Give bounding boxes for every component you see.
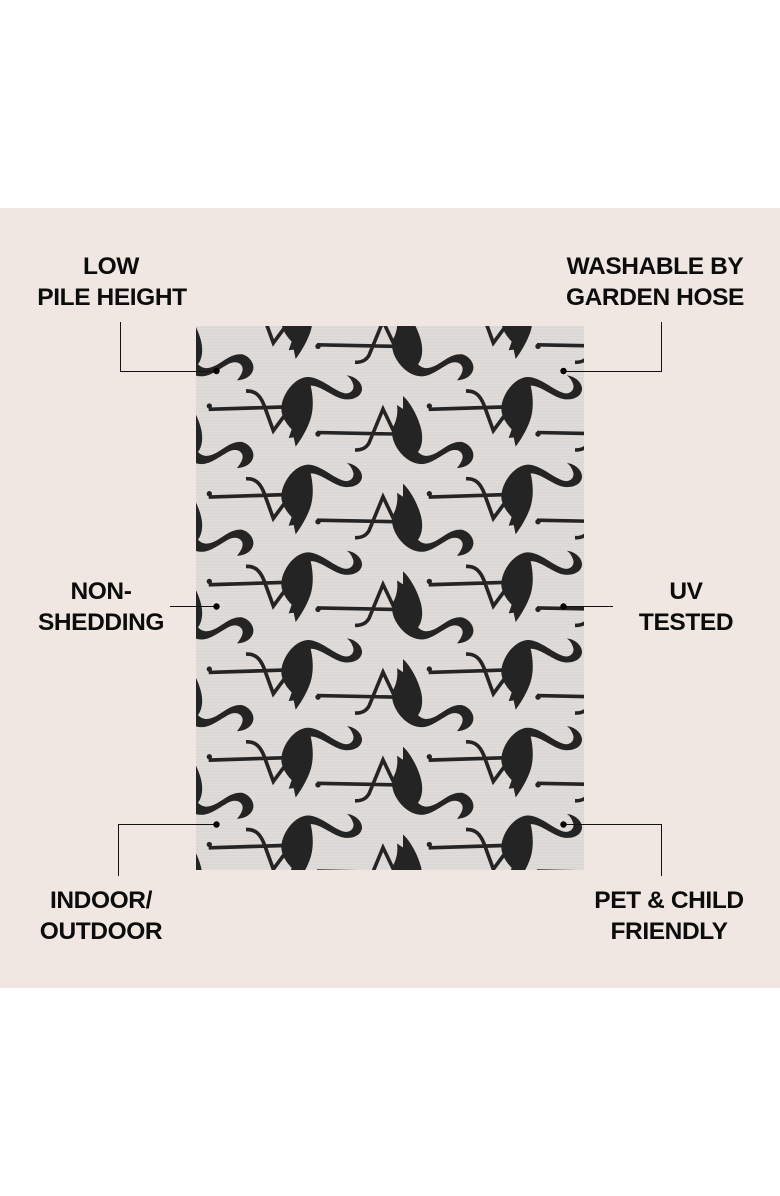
callout: non-shedding	[38, 578, 220, 636]
callout: low pile height: PILE HEIGHT	[37, 284, 187, 311]
callout: washable by garden hose: WASHABLE BY	[567, 253, 743, 280]
callout: non-shedding: NON-	[70, 578, 132, 605]
callout: low pile height: LOW	[83, 253, 140, 280]
flamingo row 4	[196, 638, 584, 732]
rug with flamingo pattern	[196, 326, 584, 870]
callout: pet and child friendly: PET & CHILD	[594, 887, 744, 914]
callout: washable by garden hose: GARDEN HOSE	[566, 284, 744, 311]
callout: pet and child friendly	[560, 821, 744, 945]
callout: pet and child friendly: FRIENDLY	[610, 918, 728, 945]
background band	[0, 208, 780, 988]
callout: indoor/outdoor: OUTDOOR	[40, 918, 163, 945]
callout: washable by garden hose	[560, 253, 744, 374]
flamingo row 0	[196, 326, 584, 380]
flamingo row 6	[196, 814, 582, 870]
flamingo row 2	[196, 463, 584, 556]
callout: uv tested: UV	[669, 578, 704, 605]
callout: low pile height	[37, 253, 220, 374]
flamingo row 3	[196, 550, 584, 644]
callout: indoor/outdoor	[40, 821, 220, 945]
callout: uv tested: TESTED	[639, 609, 733, 636]
flamingo row 5	[196, 726, 584, 819]
callout: indoor/outdoor: INDOOR/	[50, 887, 153, 914]
flamingo row 1	[196, 375, 584, 468]
callout: uv tested	[560, 578, 733, 636]
callout: non-shedding: SHEDDING	[38, 609, 164, 636]
